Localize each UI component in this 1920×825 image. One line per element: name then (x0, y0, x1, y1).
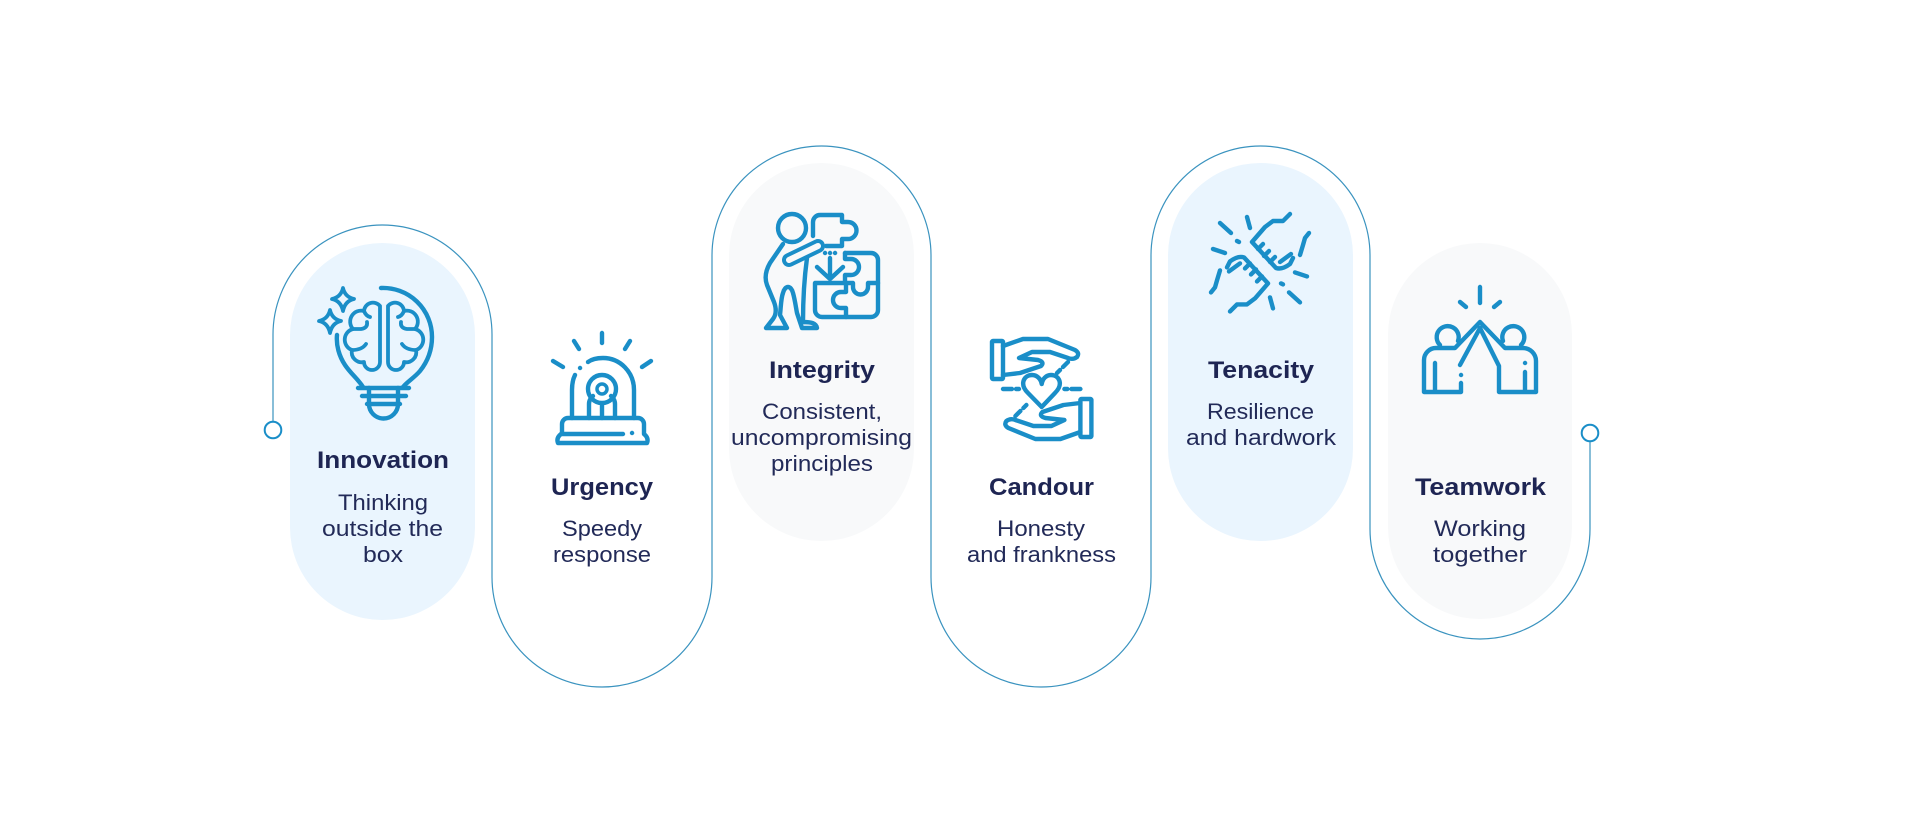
heading: Urgency: Urgency (551, 474, 654, 501)
text: Candour description: and frankness (967, 542, 1116, 567)
text: Tenacity description: and hardwork (1186, 425, 1337, 450)
text: Teamwork description: Working (1434, 516, 1526, 541)
text: Teamwork description: together (1433, 542, 1527, 567)
text: Integrity description: Consistent, (762, 399, 882, 424)
icon: hands holding a heart (992, 339, 1091, 439)
text: Urgency description (553, 516, 651, 567)
icon: siren (553, 333, 651, 443)
text: Urgency description: Speedy (562, 516, 642, 541)
icon: person fitting puzzle pieces (766, 214, 878, 328)
text: Innovation description: outside the (322, 516, 443, 541)
serpentine connector line with end circles (265, 146, 1598, 687)
text: Urgency description: response (553, 542, 651, 567)
panel: Innovation (290, 243, 475, 620)
icon: light bulb with brain (319, 288, 432, 418)
text: Integrity description (731, 399, 912, 476)
text: Integrity description: uncompromising (731, 425, 912, 450)
panel: Integrity (729, 163, 914, 541)
heading: Integrity: Integrity (769, 357, 876, 384)
text: Candour description (967, 516, 1116, 567)
text: Tenacity description (1186, 399, 1337, 450)
panel: Candour (967, 339, 1116, 567)
text: Innovation description: box (363, 542, 403, 567)
text: Tenacity description: Resilience (1207, 399, 1314, 424)
text: Integrity description: principles (771, 451, 873, 476)
panel: Urgency (551, 333, 654, 567)
panel: Teamwork (1388, 243, 1572, 619)
icon: fist bump (1211, 214, 1309, 311)
heading: Innovation: Innovation (317, 447, 449, 474)
text: Innovation description (322, 490, 443, 567)
heading: Teamwork: Teamwork (1415, 474, 1547, 501)
text: Innovation description: Thinking (338, 490, 428, 515)
heading: Tenacity: Tenacity (1208, 357, 1315, 384)
text: Candour description: Honesty (997, 516, 1085, 541)
panel: Tenacity (1168, 163, 1353, 541)
heading: Candour: Candour (989, 474, 1094, 501)
icon: two people high-fiving (1424, 287, 1536, 392)
text: Teamwork description (1433, 516, 1527, 567)
